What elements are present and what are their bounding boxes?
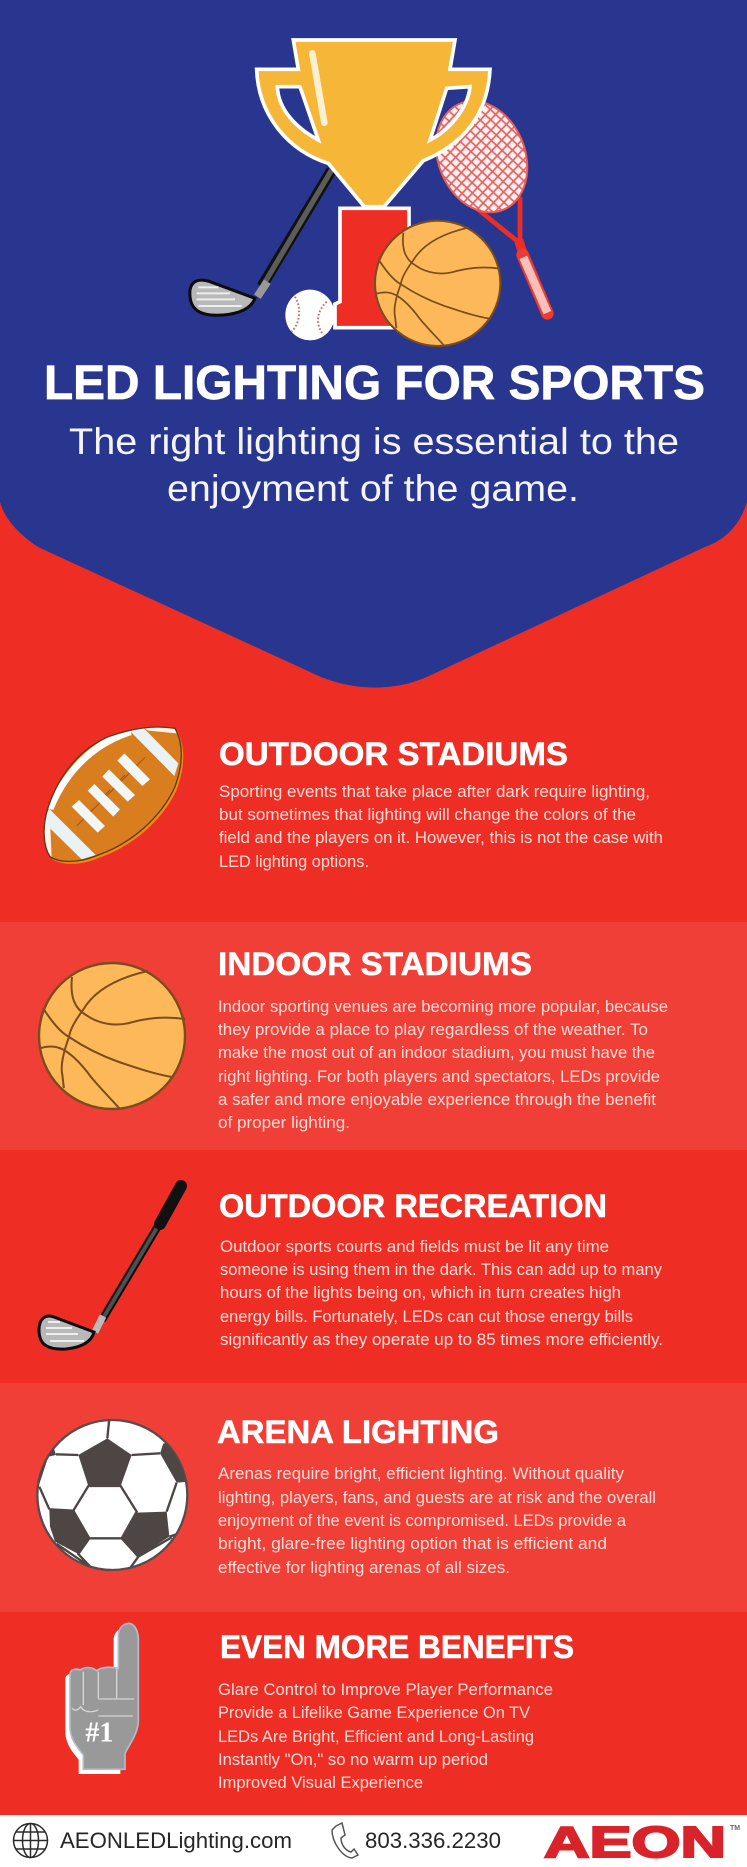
icon: baseball bbox=[285, 290, 335, 340]
panel: even more benefits bbox=[0, 1612, 747, 1815]
logo: AEON bbox=[544, 1818, 740, 1867]
text: benefits list: Glare Control to Improve Player Performance bbox=[218, 1680, 553, 1699]
text: arena lighting body: Arenas require bright, efficient lighting. Without quality bbox=[218, 1464, 624, 1483]
illustration: trophy with sports equipment bbox=[190, 40, 547, 346]
icon: football bbox=[42, 726, 183, 864]
text: benefits list bbox=[218, 1680, 553, 1792]
text: arena lighting body: enjoyment of the event is compromised. LEDs provide a bbox=[218, 1511, 627, 1530]
heading: indoor stadiums: INDOOR STADIUMS bbox=[218, 946, 532, 982]
text: indoor stadiums body: they provide a place to play regardless of the weather. To bbox=[218, 1020, 648, 1039]
text: benefits list: Improved Visual Experience bbox=[218, 1773, 423, 1792]
text: indoor stadiums body: Indoor sporting venues are becoming more popular, because bbox=[218, 997, 668, 1016]
text: outdoor recreation body bbox=[220, 1237, 663, 1349]
panel: indoor stadiums bbox=[0, 922, 747, 1150]
text: arena lighting body bbox=[218, 1464, 656, 1577]
text: outdoor stadiums body: field and the players on it. However, this is not the case with bbox=[219, 828, 663, 847]
text: outdoor stadiums body: LED lighting options. bbox=[219, 852, 369, 871]
text: indoor stadiums body: right lighting. For both players and spectators, LEDs provide bbox=[218, 1067, 660, 1086]
icon: foam finger bbox=[65, 1623, 138, 1774]
text: subtitle: The right lighting is essential to the bbox=[69, 421, 679, 462]
text: arena lighting body: bright, glare-free lighting option that is efficient and bbox=[218, 1534, 607, 1553]
icon: golf club bbox=[190, 170, 332, 315]
text: outdoor stadiums body bbox=[219, 782, 663, 871]
text: outdoor recreation body: significantly as they operate up to 85 times more efficiently. bbox=[220, 1330, 663, 1349]
text: indoor stadiums body: a safer and more enjoyable experience through the benefit bbox=[218, 1090, 656, 1109]
text: website: AEONLEDLighting.com bbox=[60, 1828, 292, 1853]
panel: footer bbox=[0, 1815, 747, 1867]
text: arena lighting body: effective for lighting arenas of all sizes. bbox=[218, 1558, 510, 1577]
logo: AEON: TM bbox=[730, 1825, 740, 1832]
text: outdoor stadiums body: but sometimes that lighting will change the colors of the bbox=[219, 805, 636, 824]
text: arena lighting body: lighting, players, fans, and guests are at risk and the overall bbox=[218, 1488, 656, 1507]
heading: outdoor stadiums: OUTDOOR STADIUMS bbox=[219, 736, 568, 772]
text: phone number: 803.336.2230 bbox=[365, 1828, 501, 1853]
text: benefits list: Instantly "On," so no warm up period bbox=[218, 1750, 488, 1769]
heading: title: LED LIGHTING FOR SPORTS bbox=[44, 357, 705, 410]
text: outdoor recreation body: hours of the lights being on, which in turn creates high bbox=[220, 1283, 621, 1302]
text: outdoor stadiums body: Sporting events that take place after dark require lighting, bbox=[219, 782, 650, 801]
text: outdoor recreation body: someone is using them in the dark. This can add up to many bbox=[220, 1260, 662, 1279]
icon: basketball bbox=[375, 221, 500, 346]
logo: AEON: AEON bbox=[544, 1818, 726, 1867]
panel: outdoor recreation bbox=[0, 1150, 747, 1383]
text: indoor stadiums body bbox=[218, 997, 668, 1132]
text: outdoor recreation body: Outdoor sports courts and fields must be lit any time bbox=[220, 1237, 609, 1256]
icon: phone bbox=[332, 1823, 358, 1858]
panel: outdoor stadiums bbox=[42, 726, 663, 871]
icon: basketball bbox=[39, 963, 185, 1109]
icon: tennis racket bbox=[420, 87, 547, 313]
text: outdoor recreation body: energy bills. Fortunately, LEDs can cut those energy bills bbox=[220, 1307, 633, 1326]
heading: arena lighting: ARENA LIGHTING bbox=[217, 1414, 499, 1450]
heading: even more benefits: EVEN MORE BENEFITS bbox=[220, 1629, 574, 1665]
text: indoor stadiums body: make the most out of an indoor stadium, you must have the bbox=[218, 1043, 655, 1062]
text: subtitle bbox=[69, 421, 679, 509]
icon: globe bbox=[14, 1824, 48, 1858]
panel: header bbox=[0, 0, 747, 688]
icon: soccer ball bbox=[37, 1418, 190, 1571]
icon: trophy cup bbox=[257, 40, 490, 328]
text: benefits list: Provide a Lifelike Game Experience On TV bbox=[218, 1703, 531, 1722]
text: benefits list: LEDs Are Bright, Efficient and Long-Lasting bbox=[218, 1727, 534, 1746]
text: subtitle: enjoyment of the game. bbox=[167, 468, 579, 509]
panel: arena lighting bbox=[0, 1383, 747, 1612]
icon: golf club bbox=[39, 1186, 181, 1349]
icon: foam finger: #1 bbox=[85, 1718, 113, 1749]
text: indoor stadiums body: of proper lighting. bbox=[218, 1113, 350, 1132]
heading: outdoor recreation: OUTDOOR RECREATION bbox=[219, 1188, 607, 1224]
